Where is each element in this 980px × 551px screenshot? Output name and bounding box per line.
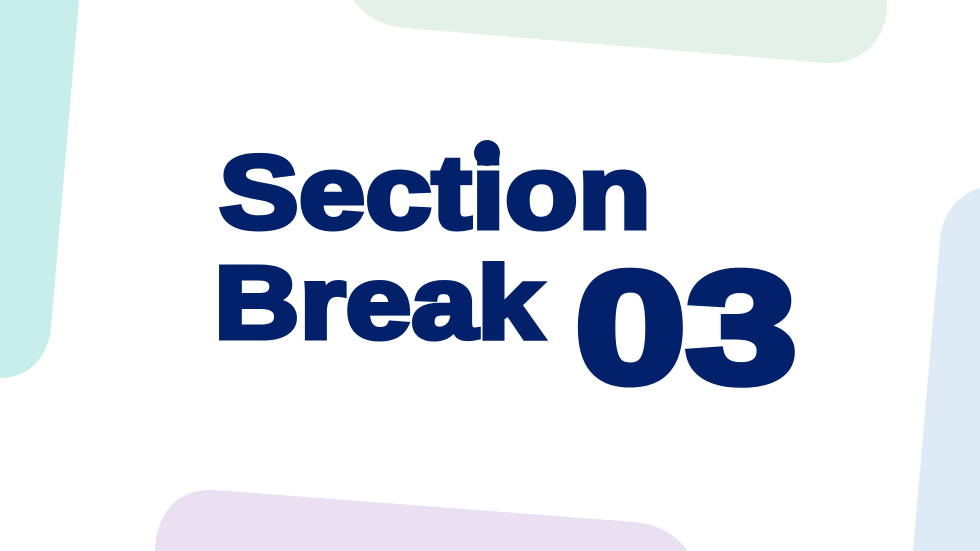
title: Break: Break xyxy=(214,245,544,360)
icon: round dot of the letter i xyxy=(474,140,500,166)
panel: purple shape, bottom xyxy=(155,490,688,551)
title: Section: Section xyxy=(219,135,651,251)
panel: teal shape, top left xyxy=(0,0,79,378)
panel: blue shape, right xyxy=(913,188,980,551)
section number: 03: 03 xyxy=(575,240,797,416)
panel: green shape, top xyxy=(353,0,887,63)
